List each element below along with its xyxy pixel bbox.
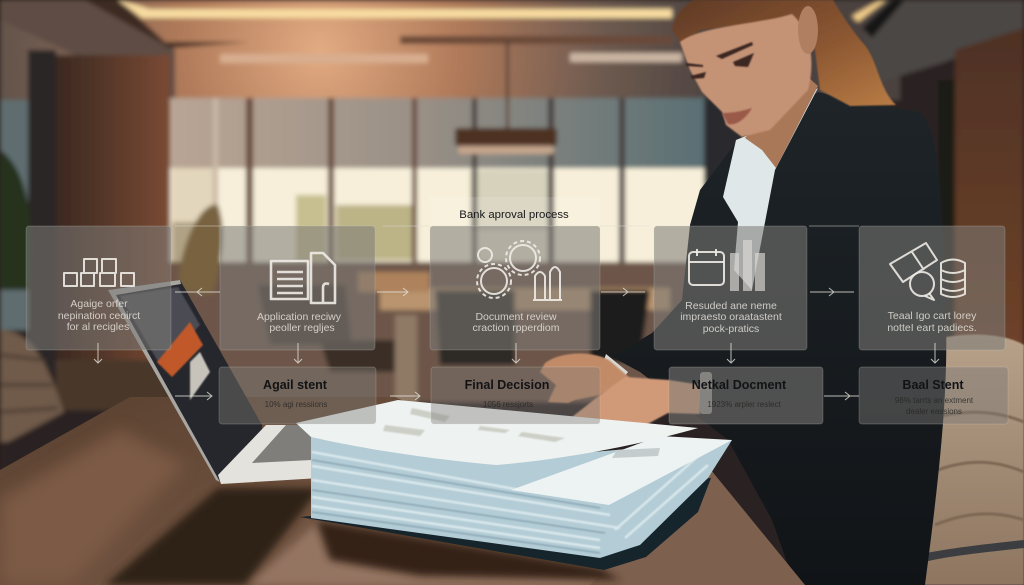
step 4 text: Resuded ane neme: [685, 300, 777, 312]
subtext: 1923% arpler reslect: [707, 400, 781, 409]
chart marks on sheet: [383, 408, 565, 442]
top sheet: [296, 400, 698, 465]
step 2 text: peoller regljes: [269, 322, 335, 334]
heading: Agail stent: [263, 378, 328, 392]
chair arm: [876, 540, 1024, 585]
panel: netkal document: [669, 367, 823, 424]
panel: step 1: [26, 226, 171, 350]
eyes and brows: [686, 42, 754, 79]
step 4 text: impraesto oraatastent: [680, 311, 782, 323]
panel: final decision: [431, 367, 600, 424]
shadow under folder: [316, 520, 620, 580]
ear: [798, 6, 818, 54]
hair: [672, 0, 896, 106]
step 1 text: nepination ceoirct: [58, 310, 140, 322]
panel row connector lines: [175, 225, 859, 227]
subtext: 10% agi ressiions: [265, 400, 327, 409]
base: [218, 425, 320, 484]
panel: baal stent: [859, 367, 1008, 424]
heading: Baal Stent: [902, 378, 964, 392]
panel: step 3: [430, 226, 600, 350]
panel: step 4: [654, 226, 807, 350]
right chair: [876, 335, 1024, 585]
title backing: [430, 197, 600, 227]
subtext: dealer eassions: [906, 407, 962, 416]
cuff: [602, 354, 628, 380]
subtext: 1056 ressjorts: [483, 400, 533, 409]
screen: [108, 280, 262, 482]
step 3 text: craction rpperdiom: [473, 322, 560, 334]
icon: calendar and bars: [689, 240, 765, 291]
jacket: [612, 92, 946, 585]
step 1 text: Agaige orfer: [70, 298, 128, 310]
shirt: [723, 88, 818, 290]
table front edge over jacket: [590, 462, 805, 585]
panel: agail stent: [219, 367, 376, 424]
icon: card, chat and coins: [890, 243, 965, 300]
subtext: 98% tarrts an extment: [895, 396, 974, 405]
step 1 text: for al recigles: [67, 321, 129, 333]
title: Bank aproval process: [459, 209, 569, 221]
lips: [722, 108, 752, 124]
upper hand: [540, 354, 630, 403]
woman: [540, 0, 946, 585]
icon: gears and bars: [477, 241, 562, 300]
step 5 text: notteI eart padiecs.: [887, 322, 977, 334]
watch: [700, 372, 712, 414]
folder: [300, 478, 711, 570]
panel: step 2: [220, 226, 375, 350]
face: [680, 14, 811, 137]
heading: Final Decision: [465, 378, 549, 392]
paper stack: [296, 400, 732, 558]
icon: documents: [271, 253, 335, 303]
step 2 text: Application reciwy: [257, 311, 342, 323]
laptop: [108, 280, 320, 484]
step 4 text: pock-pratics: [703, 323, 759, 335]
table top: [0, 397, 810, 585]
step 3 text: Document review: [475, 311, 557, 323]
heading: Netkal Docment: [692, 378, 787, 392]
second sheet: [511, 436, 732, 505]
panel: step 5: [859, 226, 1005, 350]
neck: [745, 70, 818, 168]
lower hand: [572, 377, 702, 427]
icon: blocks: [64, 259, 134, 286]
arrows between panels: [94, 288, 939, 400]
table shading: [0, 430, 600, 585]
keyboard: [252, 425, 312, 463]
step 5 text: Teaal Igo cart lorey: [888, 310, 977, 322]
